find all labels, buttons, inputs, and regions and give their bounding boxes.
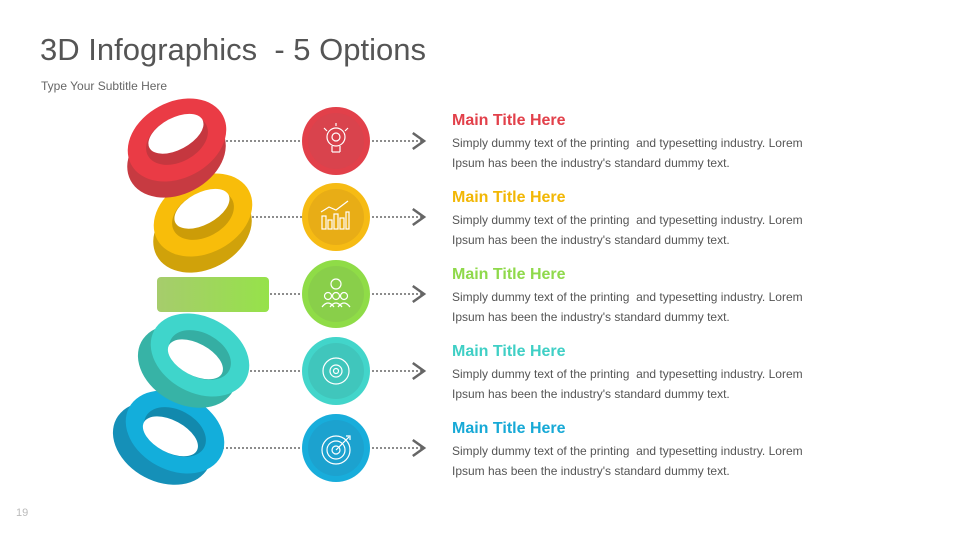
text: option 2: Simply dummy text of the printing and typesetting industry. Lorem Ipsum has been the industry's standard dummy text.	[452, 213, 803, 247]
ring: teal	[123, 294, 264, 427]
text: option 4	[452, 343, 803, 401]
connectors	[222, 141, 424, 448]
text: option 1	[452, 112, 803, 170]
ring: red	[106, 82, 247, 214]
text: option 5: Main Title Here	[452, 420, 566, 437]
text: option 3: Simply dummy text of the printing and typesetting industry. Lorem Ipsum has been the industry's standard dummy text.	[452, 290, 803, 324]
text: option 2: Main Title Here	[452, 189, 566, 206]
text: option 3: Main Title Here	[452, 266, 566, 283]
text: option 4: Simply dummy text of the printing and typesetting industry. Lorem Ipsum has been the industry's standard dummy text.	[452, 367, 803, 401]
text: option 5: Simply dummy text of the printing and typesetting industry. Lorem Ipsum has been the industry's standard dummy text.	[452, 444, 803, 478]
ring: green	[157, 277, 269, 312]
text: option 5	[452, 420, 803, 478]
icon circles	[302, 107, 370, 482]
text: option 4: Main Title Here	[452, 343, 566, 360]
subtitle: Type Your Subtitle Here	[41, 79, 167, 93]
page number: 19	[16, 507, 28, 519]
text: option 3	[452, 266, 803, 324]
ring: blue	[98, 371, 239, 504]
text: option 2	[452, 189, 803, 247]
ring: yellow	[132, 157, 273, 289]
title: 3D Infographics - 5 Options	[40, 32, 426, 67]
icons	[321, 123, 350, 464]
text: option 1: Simply dummy text of the printing and typesetting industry. Lorem Ipsum has been the industry's standard dummy text.	[452, 136, 803, 170]
text: option 1: Main Title Here	[452, 112, 566, 129]
